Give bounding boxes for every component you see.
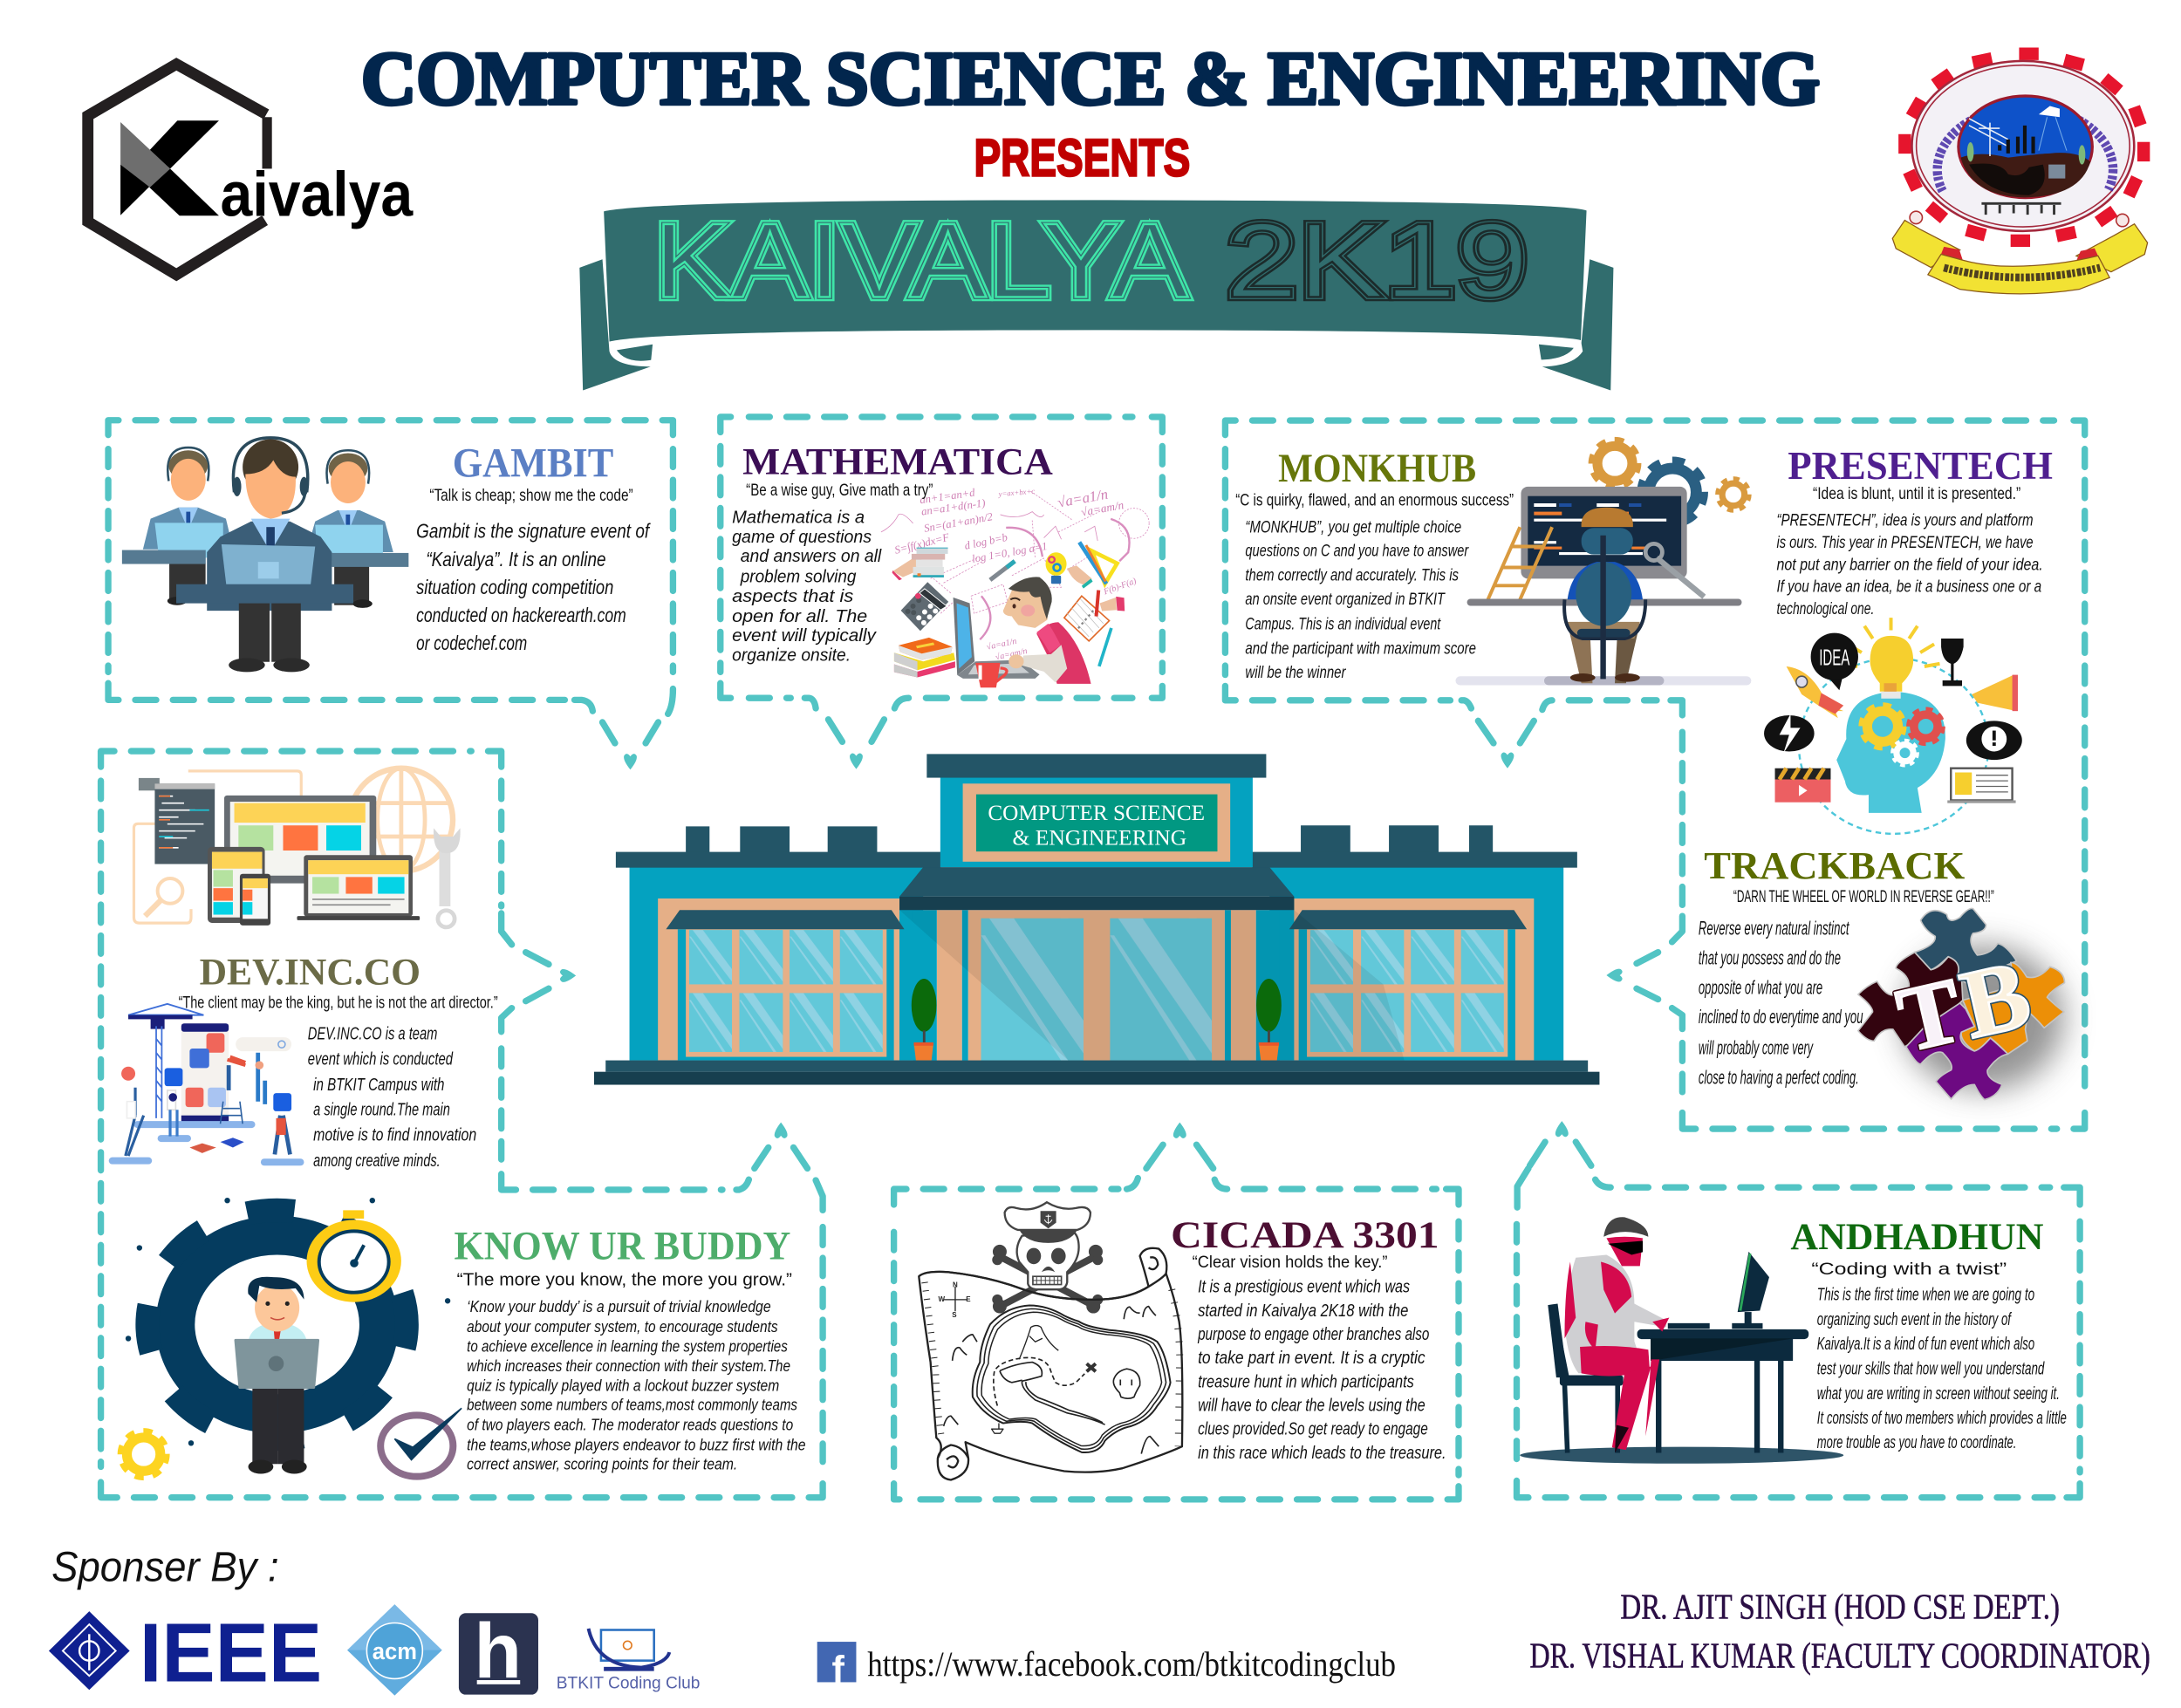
- text block: Monkhub description: them correctly and accurately. This is: [1245, 567, 1459, 585]
- illustration: T B puzzle: B: [1952, 939, 2040, 1060]
- panel: Gambit: [108, 420, 673, 769]
- heading: Gambit: GAMBIT: [453, 441, 613, 487]
- quote: Gambit: “Talk is cheap; show me the code”: [429, 487, 633, 505]
- text block: Mathematica description: and answers on all: [741, 547, 882, 566]
- text block: Dev.Inc.Co description: motive is to find innovation: [313, 1124, 476, 1144]
- text block: Presentech description: [1776, 512, 2043, 618]
- text block: Gambit description: “Kaivalya”. It is an online: [426, 548, 606, 570]
- text block: Know Ur Buddy description: quiz is typically played with a lockout buzzer system: [467, 1376, 779, 1394]
- text block: Monkhub description: Campus. This is an individual event: [1245, 616, 1441, 634]
- banner: ribbon with event name: KAIVALYA: [654, 201, 1188, 319]
- text block: Trackback description: will probably come very: [1699, 1036, 1814, 1058]
- text block: Presentech description: If you have an idea, be it a business one or a: [1776, 577, 2041, 596]
- sponsor heading: Sponser By :: [51, 1545, 279, 1591]
- text block: Cicada 3301 description: purpose to engage other branches also: [1197, 1324, 1429, 1344]
- illustration: idea head with icons: IDEA: [1819, 646, 1849, 670]
- heading: Monkhub: MONKHUB: [1278, 447, 1476, 491]
- text block: Presentech description: is ours. This year in PRESENTECH, we have: [1776, 534, 2034, 552]
- illustration: pirate treasure map: N: [953, 1281, 958, 1289]
- plants: [912, 979, 1282, 1061]
- emblem: institute gear seal: [1892, 48, 2150, 294]
- heading: Andhadhun: ANDHADHUN: [1790, 1217, 2043, 1258]
- facebook link: https://www.facebook.com/btkitcodingclub: [867, 1644, 1396, 1684]
- illustration: pirate treasure map: S: [952, 1311, 957, 1319]
- banner: ribbon with event name: 2K19: [1226, 201, 1528, 319]
- text block: Andhadhun description: test your skills that how well you understand: [1817, 1360, 2045, 1379]
- panel: Mathematica: [721, 417, 1162, 769]
- text block: Cicada 3301 description: in this race which leads to the treasure.: [1198, 1443, 1446, 1463]
- logo: IEEE: IEEE: [140, 1607, 322, 1700]
- text block: Know Ur Buddy description: which increases their connection with their system.The: [467, 1356, 790, 1375]
- text block: Mathematica description: organize onsite.: [732, 646, 851, 666]
- illustration: pirate treasure map: [919, 1202, 1182, 1480]
- illustration: student with maths scribbles: S=∫f(x)dx=F: [893, 531, 951, 557]
- text block: Presentech description: not put any barrier on the field of your idea.: [1776, 557, 2043, 575]
- illustration: masked coder at desk: [1520, 1217, 1843, 1464]
- text block: Andhadhun description: [1817, 1286, 2067, 1452]
- text block: Cicada 3301 description: clues provided.So get ready to engage: [1198, 1419, 1428, 1439]
- logo: Kaivalya hexagon: [88, 65, 414, 275]
- text block: Know Ur Buddy description: to achieve excellence in learning the system properties: [467, 1336, 788, 1355]
- facebook link: f: [831, 1649, 844, 1691]
- text block: Trackback description: that you possess and do the: [1699, 946, 1841, 968]
- illustration: idea head with icons: [1764, 618, 2022, 834]
- sign board: COMPUTER SCIENCE: [988, 800, 1205, 825]
- logo: BTKIT Coding Club: BTKIT Coding Club: [557, 1675, 700, 1693]
- text block: Andhadhun description: what you are writing in screen without seeing it.: [1817, 1384, 2060, 1404]
- text block: Cicada 3301 description: started in Kaivalya 2K18 with the: [1198, 1301, 1408, 1321]
- illustration: student with maths scribbles: an+1=an+d: [919, 486, 976, 506]
- text block: Mathematica description: game of questions: [732, 528, 872, 547]
- text block: Mathematica description: event will typically: [732, 626, 877, 646]
- text block: Gambit description: or codechef.com: [416, 632, 527, 654]
- banner: ribbon with event name: KAIVALYA: [654, 201, 1188, 319]
- text block: Trackback description: close to having a perfect coding.: [1699, 1067, 1859, 1089]
- text block: Trackback description: [1699, 918, 1863, 1089]
- text block: Mathematica description: [732, 508, 882, 666]
- heading: Cicada 3301: CICADA 3301: [1171, 1215, 1439, 1256]
- panel: Andhadhun: [1516, 1121, 2080, 1498]
- illustration: student with maths scribbles: √a=a1/n: [1056, 486, 1109, 511]
- logo: Kaivalya hexagon: aivalya: [221, 160, 414, 229]
- illustration: programmer at monitor: [1455, 440, 1751, 685]
- quote: Monkhub: “C is quirky, flawed, and an enormous success”: [1235, 492, 1514, 510]
- text block: Cicada 3301 description: treasure hunt in which participants: [1198, 1371, 1414, 1391]
- heading: Trackback: TRACKBACK: [1704, 844, 1965, 887]
- logo: HackerRank h: h: [474, 1607, 522, 1694]
- text block: Presentech description: “PRESENTECH”, idea is yours and platform: [1776, 512, 2034, 530]
- right window: [1289, 910, 1527, 1061]
- quote: Trackback: “DARN THE WHEEL OF WORLD IN REVERSE GEAR!!”: [1733, 888, 1994, 906]
- banner: ribbon with event name: 2K19: [1226, 201, 1528, 319]
- text block: Dev.Inc.Co description: in BTKIT Campus with: [313, 1075, 444, 1095]
- quote: Cicada 3301: “Clear vision holds the key.”: [1193, 1254, 1387, 1272]
- central building: [594, 754, 1599, 1085]
- text block: Cicada 3301 description: [1197, 1277, 1446, 1463]
- panel: Cicada 3301: [894, 1123, 1459, 1500]
- illustration: responsive devices: [133, 769, 461, 927]
- text block: Mathematica description: open for all. The: [732, 607, 867, 626]
- facebook link: [817, 1642, 1396, 1691]
- illustration: pirate treasure map: E: [966, 1295, 971, 1303]
- text block: Cicada 3301 description: to take part in event. It is a cryptic: [1198, 1348, 1426, 1368]
- text block: Andhadhun description: Kaivalya.It is a kind of fun event which also: [1817, 1335, 2034, 1354]
- illustration: student with maths scribbles: √a=am/n: [1080, 498, 1125, 519]
- text block: Gambit description: [416, 520, 651, 654]
- text block: Gambit description: Gambit is the signature event of: [416, 520, 651, 543]
- illustration: headset team: [122, 438, 408, 672]
- text block: Andhadhun description: organizing such event in the history of: [1817, 1310, 2013, 1329]
- text block: Dev.Inc.Co description: [308, 1024, 476, 1171]
- heading: Presentech: PRESENTECH: [1788, 443, 2053, 488]
- illustration: T B puzzle: T: [1889, 958, 1972, 1071]
- text block: Monkhub description: will be the winner: [1245, 664, 1347, 682]
- title: COMPUTER SCIENCE & ENGINEERING: [361, 36, 1820, 120]
- text block: Monkhub description: and the participant with maximum score: [1245, 640, 1476, 659]
- illustration: student with maths scribbles: Sn=(a1+an)n/2: [923, 510, 995, 535]
- text block: Dev.Inc.Co description: DEV.INC.CO is a team: [308, 1024, 437, 1044]
- quote: Dev.Inc.Co: “The client may be the king, but he is not the art director.”: [179, 994, 498, 1013]
- text block: Monkhub description: [1245, 519, 1476, 682]
- illustration: T B puzzle: [1858, 908, 2065, 1100]
- text block: Know Ur Buddy description: between some numbers of teams,most commonly teams: [467, 1396, 797, 1414]
- text block: Know Ur Buddy description: correct answer, scoring points for their team.: [467, 1455, 737, 1473]
- text block: Trackback description: Reverse every natural instinct: [1699, 918, 1849, 939]
- credits: faculty names: DR. AJIT SINGH (HOD CSE DEPT.): [1620, 1587, 2060, 1628]
- illustration: student with maths scribbles: y=ax+bx+c: [997, 487, 1036, 498]
- quote: Know Ur Buddy: “The more you know, the more you grow.”: [457, 1271, 792, 1290]
- text block: Know Ur Buddy description: ‘Know your buddy’ is a pursuit of trivial knowledge: [467, 1297, 771, 1315]
- text block: Monkhub description: “MONKHUB”, you get multiple choice: [1245, 519, 1461, 537]
- heading: Dev.Inc.Co: DEV.INC.CO: [200, 952, 420, 993]
- heading: Know Ur Buddy: KNOW UR BUDDY: [454, 1224, 790, 1268]
- illustration: T B puzzle: B: [1952, 939, 2040, 1060]
- text block: Dev.Inc.Co description: event which is conducted: [308, 1049, 454, 1069]
- text block: Know Ur Buddy description: about your computer system, to encourage students: [467, 1317, 778, 1336]
- text block: Trackback description: inclined to do everytime and you: [1699, 1006, 1863, 1028]
- heading: Mathematica: MATHEMATICA: [742, 441, 1053, 482]
- quote: Presentech: “Idea is blunt, until it is presented.”: [1813, 485, 2020, 503]
- illustration: student with maths scribbles: log 1=0, log a=1: [971, 540, 1048, 565]
- illustration: student with maths scribbles: √a=a1/n: [986, 637, 1017, 652]
- text block: Cicada 3301 description: It is a prestigious event which was: [1198, 1277, 1410, 1297]
- text block: Know Ur Buddy description: of two players each. The moderator reads questions to: [467, 1415, 793, 1433]
- text block: Gambit description: situation coding competition: [416, 576, 613, 598]
- illustration: student with maths scribbles: an=a1+d(n-1): [920, 496, 986, 518]
- quote: Andhadhun: “Coding with a twist”: [1811, 1261, 2007, 1279]
- logo: IEEE: [49, 1607, 322, 1700]
- text block: Andhadhun description: This is the first time when we are going to: [1817, 1286, 2034, 1305]
- banner: ribbon with event name: KAIVALYA: [654, 201, 1188, 319]
- logo: HackerRank h: [459, 1607, 538, 1695]
- illustration: student with maths scribbles: [881, 486, 1149, 687]
- logo: ACM: acm: [373, 1637, 417, 1664]
- text block: Dev.Inc.Co description: a single round.The main: [313, 1100, 450, 1120]
- quote: Mathematica: “Be a wise guy, Give math a try”: [746, 482, 933, 500]
- text block: Andhadhun description: more trouble as you have to coordinate.: [1817, 1433, 2016, 1452]
- text block: Gambit description: conducted on hackerearth.com: [416, 604, 626, 626]
- panel: Dev.Inc.Co and Know Ur Buddy frame: [101, 751, 823, 1498]
- illustration: person with gear and stopwatch: [120, 1198, 461, 1478]
- logo: BTKIT Coding Club: [557, 1629, 700, 1693]
- logo: ACM: [347, 1604, 442, 1696]
- credits: faculty names: [1530, 1587, 2150, 1677]
- text block: Monkhub description: an onsite event organized in BTKIT: [1245, 591, 1446, 609]
- banner: ribbon with event name: [579, 200, 1613, 391]
- text block: Know Ur Buddy description: the teams,whose players endeavor to buzz first with the: [467, 1435, 806, 1453]
- text block: Know Ur Buddy description: [467, 1297, 806, 1473]
- illustration: app construction crew: [109, 1004, 304, 1165]
- text block: Mathematica description: Mathematica is a: [732, 508, 865, 527]
- subtitle: presents: PRESENTS: [974, 128, 1190, 188]
- text block: Presentech description: technological one.: [1776, 600, 1874, 618]
- illustration: student with maths scribbles: F(b)-F(a): [1102, 577, 1138, 598]
- panel: Monkhub, Presentech and Trackback frame: [1225, 420, 2085, 1129]
- illustration: student with maths scribbles: d log b=b: [963, 531, 1008, 552]
- sign board: & ENGINEERING: [1012, 825, 1186, 851]
- sign board: [976, 795, 1217, 851]
- text block: Monkhub description: questions on C and you have to answer: [1245, 543, 1469, 561]
- text block: Mathematica description: aspects that is: [732, 587, 853, 606]
- text block: Cicada 3301 description: will have to clear the levels using the: [1198, 1396, 1426, 1416]
- text block: Trackback description: opposite of what you are: [1699, 977, 1822, 999]
- banner: ribbon with event name: 2K19: [1226, 201, 1528, 319]
- illustration: pirate treasure map: W: [939, 1295, 946, 1303]
- illustration: student with maths scribbles: √a=am/n: [995, 646, 1029, 662]
- illustration: T B puzzle: T: [1889, 958, 1972, 1071]
- text block: Dev.Inc.Co description: among creative minds.: [313, 1151, 441, 1171]
- left window: [666, 910, 905, 1061]
- text block: Mathematica description: problem solving: [740, 567, 856, 586]
